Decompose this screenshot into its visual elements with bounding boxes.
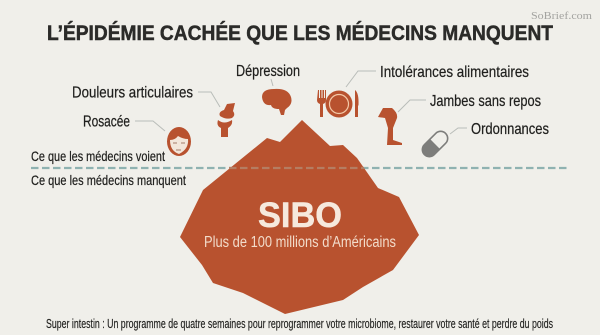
- symptom: food intolerances: [317, 64, 529, 118]
- symptom: food intolerances: Intolérances alimentaires: [380, 64, 529, 81]
- label: missed: Ce que les médecins manquent: [31, 172, 186, 188]
- iceberg subtitle: Plus de 100 millions d’Américains: [204, 234, 396, 251]
- icon: pill: [419, 128, 451, 160]
- symptom: restless legs: Jambes sans repos: [430, 93, 541, 110]
- icon: brain: [262, 89, 292, 115]
- label: visible: Ce que les médecins voient: [31, 148, 165, 164]
- waterline over iceberg: [229, 167, 364, 169]
- icon: knee joint: [217, 103, 235, 137]
- waterline: [31, 167, 568, 169]
- symptom: joint pain: Douleurs articulaires: [72, 84, 193, 102]
- title: L’ÉPIDÉMIE CACHÉE QUE LES MÉDECINS MANQUENT: [47, 20, 553, 45]
- symptom: rosacea: [83, 114, 191, 156]
- symptom: prescriptions: Ordonnances: [471, 121, 549, 138]
- symptom: restless legs: [378, 93, 541, 145]
- symptom: rosacea: Rosacée: [83, 114, 130, 130]
- symptom: depression: Dépression: [236, 63, 300, 80]
- watermark: SoBrief.com: [531, 11, 592, 22]
- iceberg: [180, 120, 419, 314]
- icon: face: [167, 127, 191, 156]
- icon: plate and cutlery: [317, 90, 359, 118]
- symptom: joint pain: [72, 84, 235, 137]
- symptom: depression: [236, 63, 300, 115]
- icon: leg: [378, 108, 402, 145]
- symptom: prescriptions: [419, 121, 549, 160]
- iceberg title: SIBO: [258, 196, 342, 235]
